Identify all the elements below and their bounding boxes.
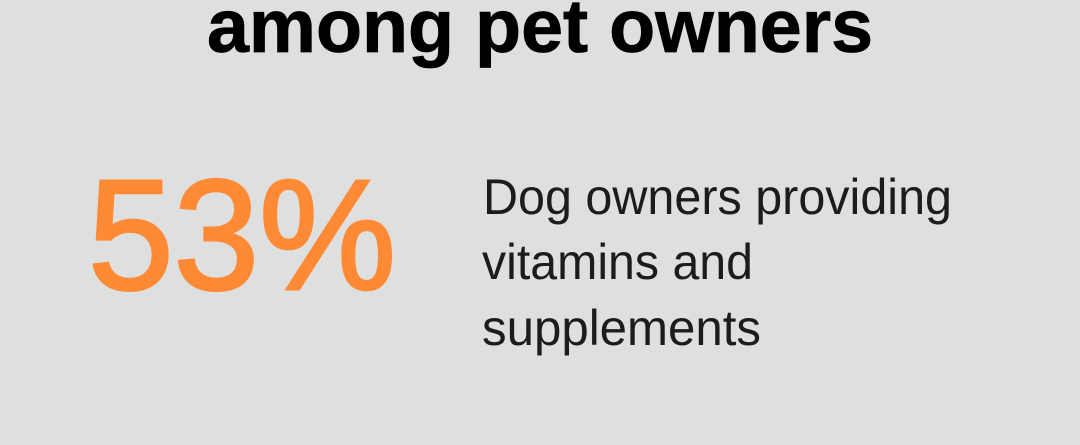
stat description: vitamins and (482, 234, 753, 290)
stat description: supplements (482, 300, 761, 356)
statistic: 53%: 53% (88, 148, 396, 323)
stat description (482, 169, 952, 356)
stat description: Dog owners providing (483, 169, 952, 225)
